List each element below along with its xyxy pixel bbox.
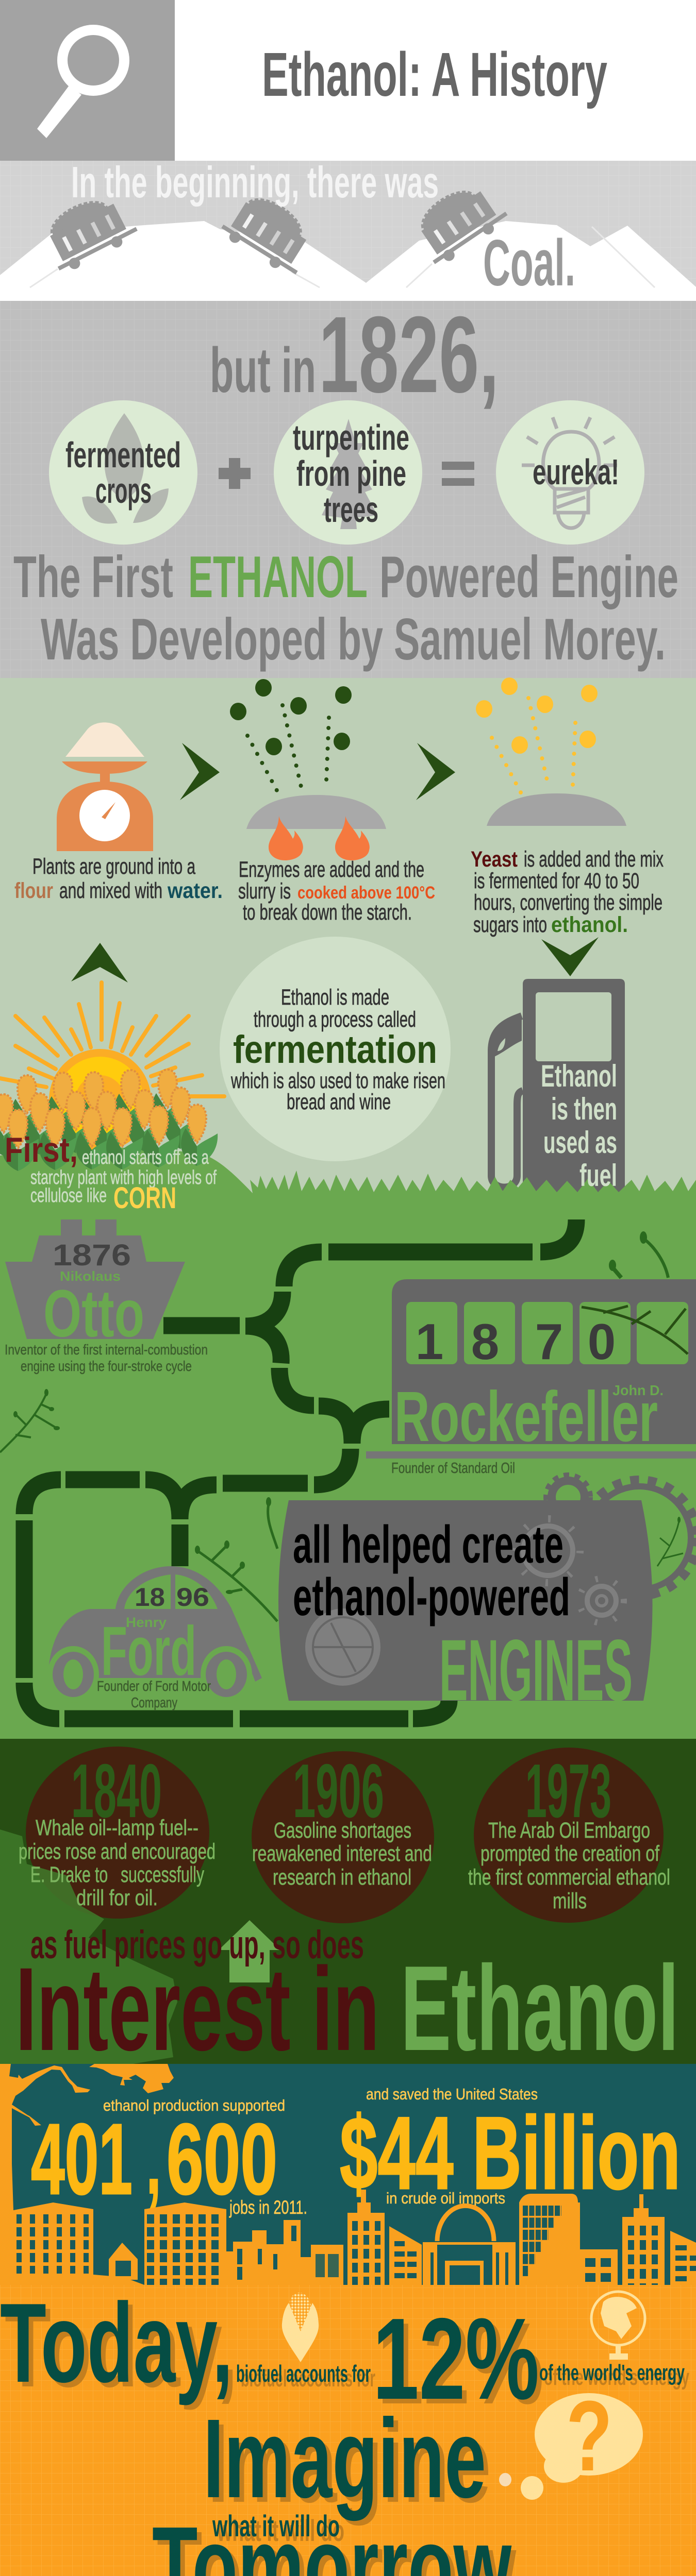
arrow: chevron down xyxy=(541,937,599,976)
text: pump label: is then xyxy=(551,1092,617,1126)
heading: in the beginning: In the beginning, there was xyxy=(71,158,439,207)
ship: Otto: Nikolaus xyxy=(60,1268,121,1284)
odometer tank: Rockefeller: 8 xyxy=(471,1313,499,1370)
icon: gauge xyxy=(305,1608,380,1686)
circle: turpentine: turpentine xyxy=(293,417,409,457)
odometer tank: Rockefeller: 7 xyxy=(535,1313,563,1370)
engine block xyxy=(278,1500,653,1719)
icon: mine cart 2 xyxy=(218,187,322,280)
car: Ford: Founder of Ford Motor xyxy=(97,1678,211,1694)
text: first corn: First, xyxy=(5,1130,78,1170)
heading: but in 1826 xyxy=(210,294,499,415)
heading: first ethanol powered engine: ETHANOL xyxy=(188,545,368,610)
stat: jobs xyxy=(31,2096,307,2218)
heading: but in 1826: 1826, xyxy=(319,294,499,415)
heading: today 12 percent xyxy=(0,2280,685,2424)
panel: coal xyxy=(0,158,696,301)
circle: turpentine: from pine xyxy=(296,453,406,494)
circle: fermentation explainer xyxy=(220,937,451,1161)
text: step enzymes: slurry is xyxy=(238,879,291,904)
icon: corn xyxy=(282,2293,319,2362)
hill and grass xyxy=(0,1148,696,1219)
text: step flour: Plants are ground into a xyxy=(32,854,195,879)
circle: fermentation explainer: Ethanol is made xyxy=(281,985,389,1010)
heading: today 12 percent: biofuel accounts for xyxy=(236,2360,371,2387)
odometer tank: Rockefeller: 0 xyxy=(588,1313,616,1370)
arrow: chevron up xyxy=(71,943,128,982)
icon: gears behind engine xyxy=(548,1477,696,1596)
panel: today xyxy=(0,2280,696,2576)
circle: 1906 xyxy=(252,1749,434,1923)
circle: fermented crops: crops xyxy=(95,470,152,511)
stat: jobs: , xyxy=(145,2103,162,2215)
arrow: chevron right 2 xyxy=(416,743,455,800)
car: Ford xyxy=(47,1566,262,1710)
circle: 1906: research in ethanol xyxy=(273,1865,411,1890)
mountain ridges xyxy=(30,227,655,287)
heading: but in 1826: but in xyxy=(210,335,316,406)
circle: fermented crops xyxy=(49,400,197,545)
text: 1840: prices rose and encouraged xyxy=(19,1839,216,1864)
stat: jobs: 401 xyxy=(31,2103,132,2215)
car: Ford: 18 xyxy=(135,1583,165,1612)
mountains xyxy=(0,221,696,301)
panel: economic impact xyxy=(0,2064,696,2285)
text: 1840: E. Drake to successfully xyxy=(30,1862,204,1887)
heading: imagine tomorrow: Imagine xyxy=(203,2396,486,2521)
circle: 1973: 1973 xyxy=(525,1749,611,1834)
icon: orange tree xyxy=(0,2064,174,2210)
stat: savings: and saved the United States xyxy=(366,2085,538,2103)
text: step flour xyxy=(14,854,223,903)
text: step enzymes xyxy=(238,857,435,925)
icon: corn field xyxy=(0,1070,218,1171)
text: pump label: used as xyxy=(543,1125,617,1160)
stat: jobs: 600 xyxy=(167,2103,277,2215)
circle: turpentine xyxy=(274,400,422,545)
heading: today 12 percent: Today, xyxy=(0,2280,233,2406)
text: step yeast: Yeast xyxy=(471,847,518,872)
circle: 1906: reawakened interest and xyxy=(252,1841,432,1866)
text: pump label: fuel xyxy=(579,1158,617,1193)
icon: vines xyxy=(0,1231,683,1621)
circle: 1840 xyxy=(26,1747,209,1919)
ship: Otto xyxy=(5,1219,208,1374)
circle: 1973: mills xyxy=(553,1889,587,1913)
odometer tank: Rockefeller: John D. xyxy=(612,1382,664,1398)
ship: Otto: 1876 xyxy=(53,1239,131,1272)
panel: 1826 xyxy=(0,294,696,678)
icon: sun rays xyxy=(0,982,224,1151)
text: first corn: starchy plant with high levels of xyxy=(30,1167,217,1189)
circle: 1906: Gasoline shortages xyxy=(274,1818,411,1843)
heading: today 12 percent: 12% xyxy=(373,2294,539,2424)
heading: first ethanol powered engine xyxy=(13,545,678,672)
ship: Otto: Inventor of the first internal-combustion xyxy=(5,1342,208,1358)
text: step yeast xyxy=(471,847,664,937)
ship: Otto: engine using the four-stroke cycle xyxy=(21,1358,192,1374)
text: 1840 xyxy=(19,1749,216,1910)
circle: fermentation explainer: bread and wine xyxy=(287,1090,391,1114)
arrow: chevron right 1 xyxy=(180,743,220,800)
text: step flour: water. xyxy=(167,878,223,903)
operator: equals xyxy=(442,462,474,486)
icon: engine gears xyxy=(516,1519,624,1623)
stat: jobs: jobs in 2011. xyxy=(229,2197,307,2218)
circle: fermented crops: fermented xyxy=(65,435,181,475)
ship: Otto: Otto xyxy=(43,1276,144,1351)
icon: kitchen scale with flour xyxy=(57,722,153,851)
panel: inventors xyxy=(0,1216,696,1739)
heading: imagine tomorrow xyxy=(152,2396,529,2576)
text: pump label: Ethanol xyxy=(541,1059,617,1093)
circle: fermentation explainer: through a process called xyxy=(254,1007,416,1032)
arrow: up xyxy=(219,1920,280,1982)
text: first corn: cellulose like xyxy=(30,1185,107,1207)
text: first corn: CORN xyxy=(113,1181,176,1215)
heading: imagine tomorrow: what it will do xyxy=(212,2510,340,2543)
odometer tank: Rockefeller xyxy=(366,1279,696,1477)
text: step yeast: ethanol. xyxy=(551,912,628,937)
heading: interest in ethanol: Interest in xyxy=(15,1943,379,2075)
circle: fermentation explainer: fermentation xyxy=(233,1028,437,1072)
circle: eureka: eureka! xyxy=(533,452,619,492)
panel: header xyxy=(0,0,696,161)
odometer tank: Rockefeller: 1 xyxy=(416,1313,443,1370)
text: first corn: ethanol starts off as a xyxy=(82,1147,209,1168)
text: step flour: and mixed with xyxy=(59,878,162,903)
circle: turpentine: trees xyxy=(324,489,378,530)
circle: 1973 xyxy=(468,1748,670,1923)
heading: first ethanol powered engine: The First xyxy=(13,545,173,610)
stat: jobs: ethanol production supported xyxy=(103,2096,285,2114)
skyline xyxy=(0,2190,696,2285)
text: step enzymes: cooked above 100°C xyxy=(297,883,435,903)
icon: thought bubble xyxy=(499,2380,643,2500)
text: first corn xyxy=(5,1130,217,1215)
text: step flour: flour xyxy=(14,878,53,903)
stat: savings: in crude oil imports xyxy=(386,2189,505,2207)
circle: fermentation explainer: which is also used to make risen xyxy=(230,1069,445,1093)
icon: magnifying glass xyxy=(37,30,124,138)
icon: thought bubble: ? xyxy=(566,2380,612,2492)
odometer tank: Rockefeller: Founder of Standard Oil xyxy=(391,1460,515,1477)
icon: yeast over vat xyxy=(476,677,626,826)
circle: eureka xyxy=(496,400,644,545)
text: step enzymes: to break down the starch. xyxy=(243,900,412,925)
tree silhouette xyxy=(0,1829,177,2064)
pipeline xyxy=(24,1219,576,1719)
text: step enzymes: Enzymes are added and the xyxy=(239,857,424,882)
icon: enzymes over burner xyxy=(230,679,386,860)
car: Ford: Ford xyxy=(101,1612,196,1690)
car: Ford: 96 xyxy=(176,1583,209,1612)
car: Ford: Henry xyxy=(126,1615,167,1630)
icon: mine cart 1 xyxy=(37,187,140,276)
panel: fermentation process xyxy=(0,677,696,1219)
text: as fuel prices go up: as fuel prices go up, so does xyxy=(30,1923,364,1967)
text: pump label xyxy=(541,1059,617,1193)
icon: gas pump xyxy=(490,979,625,1201)
text: step yeast: sugars into xyxy=(473,912,547,937)
icon: mine cart 3 xyxy=(408,175,511,269)
text: 1840: drill for oil. xyxy=(76,1886,158,1910)
panel: fuel prices xyxy=(0,1739,696,2076)
heading: coal: Coal. xyxy=(483,226,575,299)
operator: plus xyxy=(219,458,251,489)
circle: 1906: 1906 xyxy=(293,1749,384,1834)
text: 1840: Whale oil--lamp fuel-- xyxy=(36,1816,198,1840)
text: 1840: 1840 xyxy=(71,1749,162,1834)
icon: globe xyxy=(591,2292,645,2360)
car: Ford: Company xyxy=(131,1694,177,1710)
